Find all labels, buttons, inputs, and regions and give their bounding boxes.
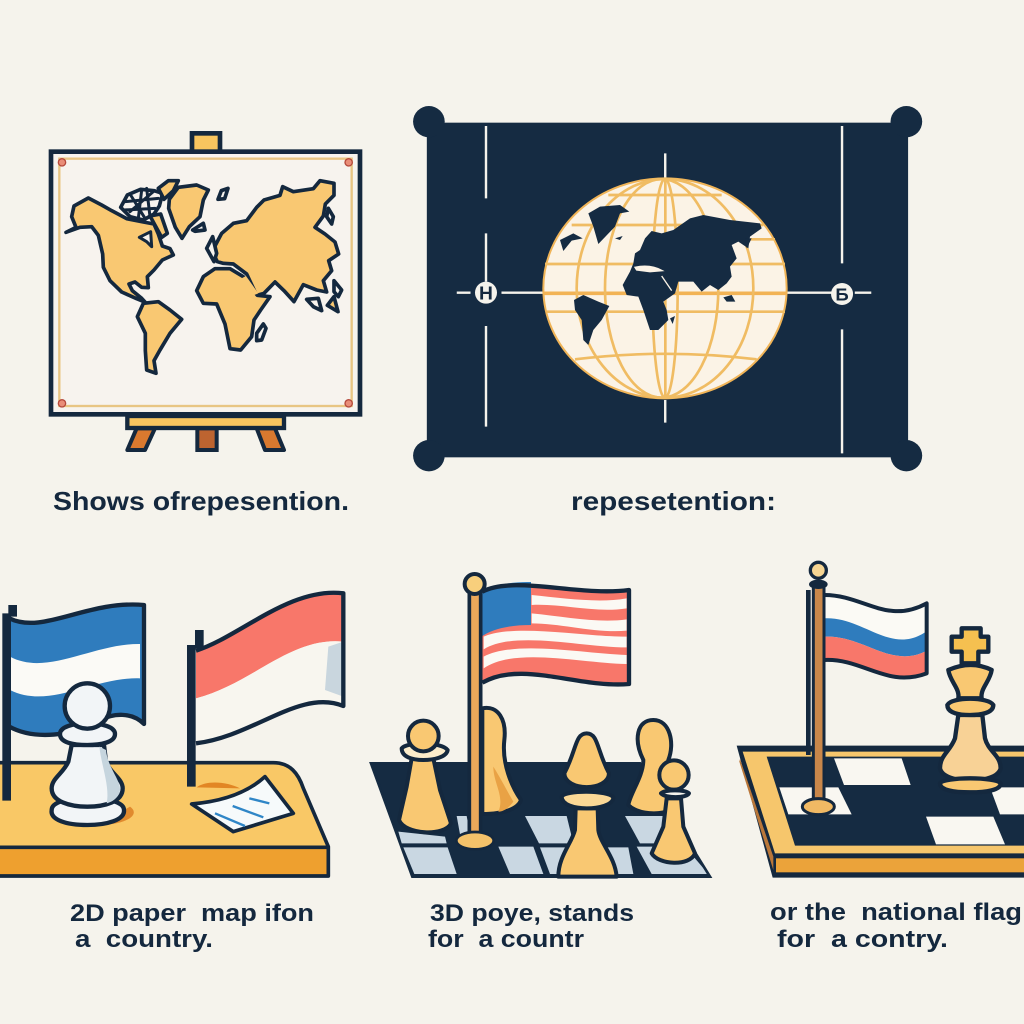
south america: [137, 302, 182, 373]
chess board: [371, 763, 710, 877]
madagascar: [257, 324, 266, 341]
caption: 2D map: 2D paper map ifon: [70, 900, 314, 927]
caption: 3D piece: for a countr: [428, 926, 584, 953]
flag: tricolour: [825, 595, 927, 678]
north america: [66, 198, 173, 302]
panel: dark board: [413, 106, 922, 471]
rook piece behind flag: [482, 708, 521, 814]
board frame: [737, 746, 1024, 878]
pawn front right: [652, 760, 695, 863]
caption: 3D piece: 3D poye, stands: [430, 900, 634, 927]
globe continents: [560, 205, 762, 345]
panel: paper map on easel: [51, 133, 360, 450]
panel: flag and king on board: [737, 562, 1024, 878]
flagpole: [7, 605, 13, 801]
flag: coral and white: [191, 593, 343, 788]
caption: national flag: or the national flag: [770, 899, 1022, 926]
british isles: [207, 237, 217, 262]
flagpole: [802, 562, 834, 815]
note paper: [192, 777, 293, 832]
arctic islands: [121, 189, 163, 220]
dark board: [427, 123, 908, 457]
map board: [51, 152, 360, 414]
caption: 2D map: a country.: [75, 926, 213, 953]
globe: [543, 178, 787, 398]
flag: stars and stripes: [482, 582, 629, 684]
left axis marker: H: [479, 284, 493, 304]
caption: national flag: [770, 899, 1022, 953]
iceland: [218, 188, 228, 199]
right axis marker: [831, 283, 853, 305]
panel: flags and pawn on table: [0, 593, 343, 877]
eurasia: [212, 181, 339, 302]
board squares: [779, 758, 1024, 844]
africa: [197, 269, 270, 350]
flag: blue and white: [7, 605, 144, 801]
easel tray and legs: [127, 416, 284, 450]
japan and islands: [327, 208, 333, 224]
board corner knobs: [413, 106, 922, 471]
globe grid: [544, 179, 786, 398]
world map outline: [66, 181, 342, 373]
caption: 2D map: [70, 900, 314, 953]
table: [0, 763, 328, 877]
africa and asia join: [238, 276, 258, 297]
heading: left: Shows ofrepesention.: [53, 486, 349, 516]
easel top tab: [192, 133, 220, 152]
pawn back right: [628, 720, 671, 813]
caption: 3D piece: [428, 900, 634, 953]
pawn left: [399, 721, 451, 832]
left axis marker: [475, 282, 497, 304]
greenland: [169, 185, 208, 238]
corner pins: [58, 159, 352, 407]
flagpole: [456, 574, 494, 849]
flagpole: [191, 630, 199, 787]
mediterranean and red sea: [635, 266, 672, 291]
caption: national flag: for a contry.: [777, 926, 948, 953]
panel: flag and chess pieces on board: [371, 574, 710, 877]
right axis marker: Б: [835, 284, 849, 305]
map inner border: [59, 159, 352, 406]
pawn: [52, 683, 134, 825]
great lakes: [139, 232, 152, 247]
king piece: [940, 628, 1001, 792]
axis guide lines: [457, 126, 871, 453]
bishop centre: [558, 733, 617, 877]
heading: right: repesetention:: [571, 486, 776, 516]
